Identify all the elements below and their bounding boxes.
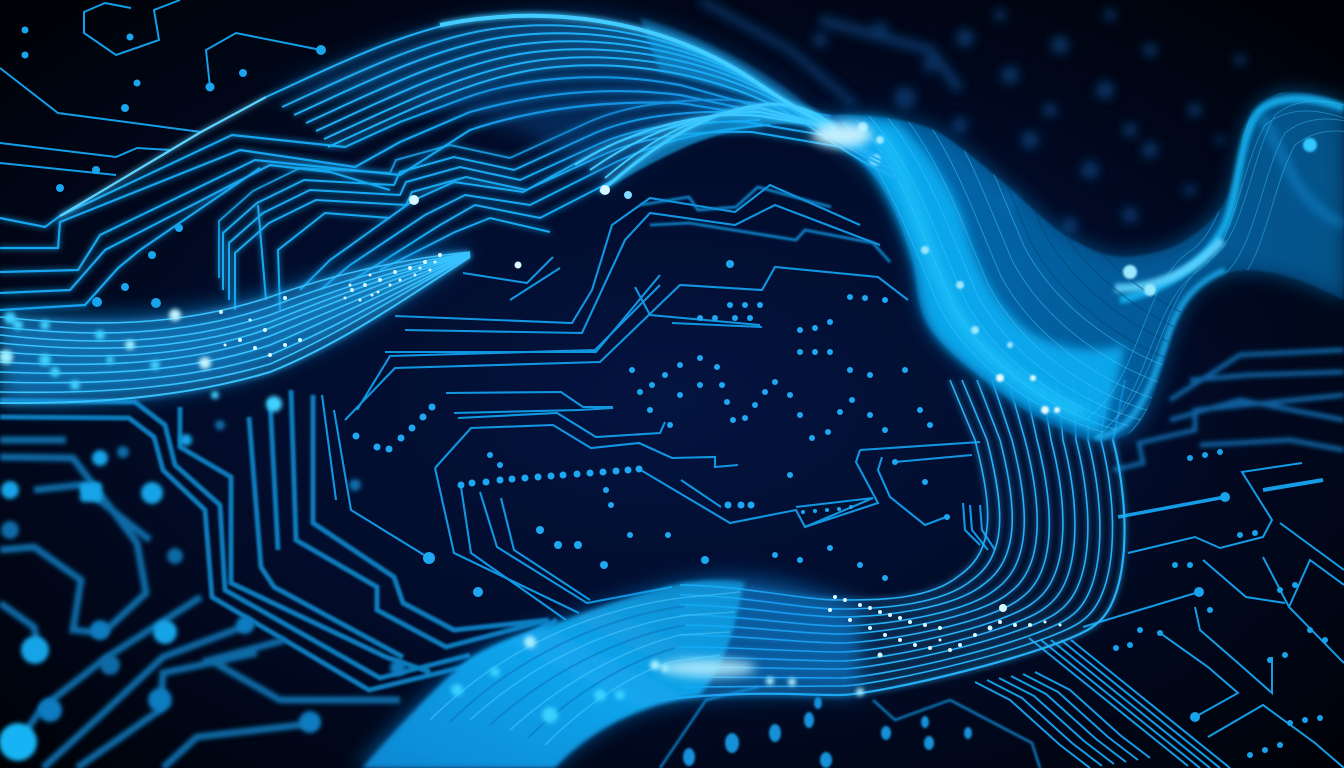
ribbon outer edge [60, 97, 266, 216]
second ribbon sheet [600, 104, 845, 192]
sparkles: lower band [828, 595, 1062, 658]
ribbon translucent body [818, 92, 1344, 441]
ribbon outer glow [818, 92, 1344, 441]
band bokeh [0, 309, 219, 399]
top sweep highlight [440, 16, 835, 128]
upper ribbon [60, 10, 897, 216]
ribbon fine strands [842, 92, 1344, 438]
lower-left blurred nodes [0, 396, 406, 761]
ribbon crease highlight [1115, 240, 1222, 288]
lower ribbon [356, 578, 864, 768]
bokeh dots: top right [700, 0, 1246, 233]
central angular strands [219, 100, 847, 310]
right ribbon [817, 79, 1344, 452]
lower ribbon glow [356, 578, 860, 768]
sheet converging to crossing [640, 18, 835, 128]
ribbon bright band [835, 118, 1125, 435]
bright crossing [812, 123, 872, 147]
lower ribbon bokeh [451, 636, 864, 723]
lower-left out-of-focus traces [0, 440, 400, 768]
band glow [0, 250, 470, 405]
top-left circuit traces [0, 0, 321, 175]
ribbon right inner edge [1260, 115, 1344, 225]
central circuit traces [322, 185, 995, 620]
bottom centre traces and blurred pads [660, 687, 1040, 768]
upper-right blurred traces [1113, 350, 1344, 470]
lower ribbon fill [362, 580, 745, 768]
band strands [0, 252, 470, 403]
lower ribbon bright patch [660, 659, 756, 677]
lower-left blurred traces [0, 390, 557, 690]
ribbon bright core [880, 135, 1085, 415]
right circuit pads [1113, 449, 1328, 758]
ribbon sparkle points [858, 122, 1317, 414]
upper-centre traces behind ribbon [640, 187, 890, 262]
left angular traces [0, 77, 835, 310]
ribbon lower-right edge [1095, 270, 1225, 438]
top-left circuit pads [22, 26, 326, 308]
sparkles: left band [219, 185, 632, 357]
ribbon strands [266, 15, 897, 178]
ribbon curtain strands [660, 380, 1125, 700]
right circuit traces [975, 463, 1344, 768]
ribbon glow [266, 10, 835, 190]
lower ribbon streaks [430, 592, 740, 745]
left fibre band [0, 250, 470, 405]
central dotted pads [352, 260, 950, 597]
ribbon right crest edge [1120, 99, 1344, 300]
